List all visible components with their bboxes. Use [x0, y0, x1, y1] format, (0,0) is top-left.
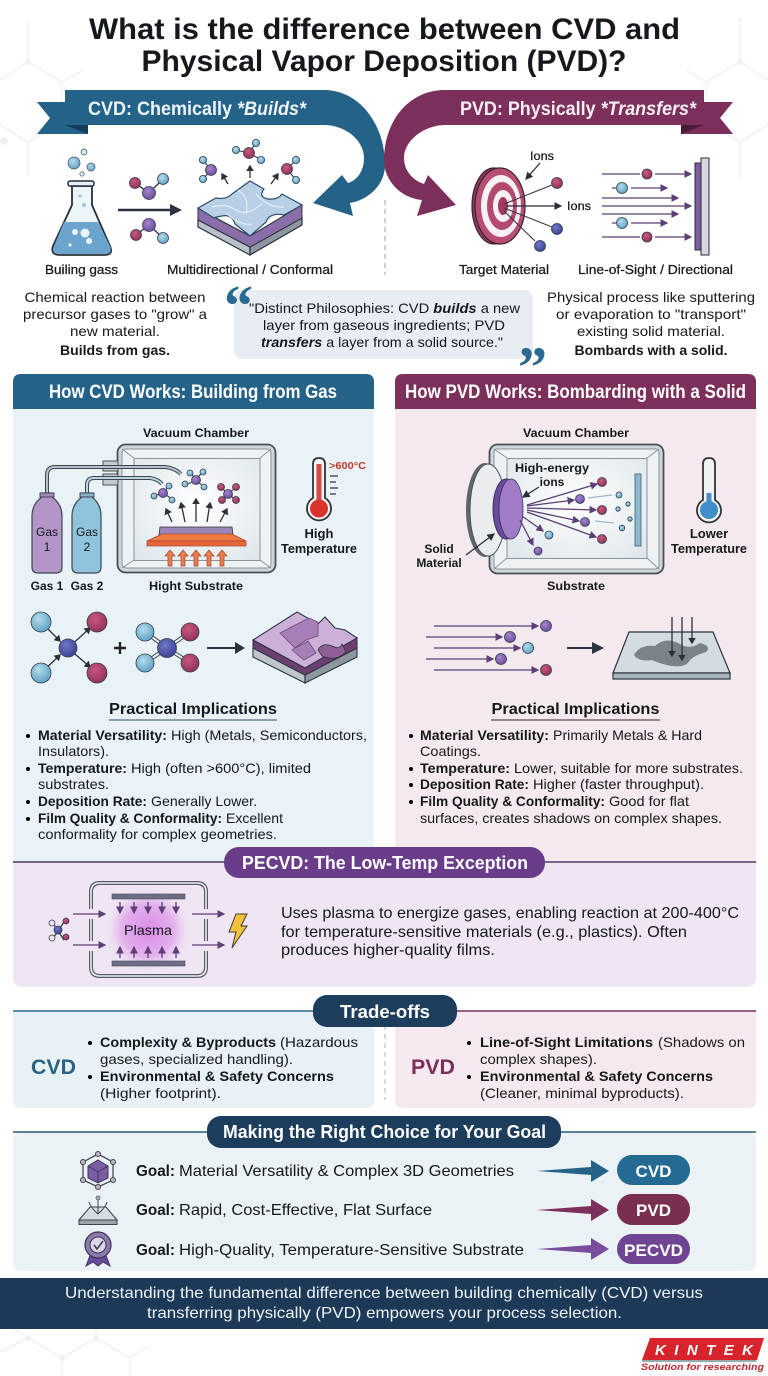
goal row 1: Goal: [136, 1163, 175, 1180]
PVD trade-offs panel [395, 1011, 756, 1108]
PVD trade-offs panel: Environmental & Safety Concerns [480, 1068, 713, 1084]
section: making the right choice [13, 1116, 756, 1271]
callout: distinct philosophies quote: transfers a layer from a solid source." [261, 334, 503, 350]
icon: lightning bolt [229, 914, 247, 948]
goal row 2: Rapid, Cost-Effective, Flat Surface [179, 1202, 432, 1219]
callout: distinct philosophies quote: layer from gaseous ingredients; PVD [263, 317, 505, 333]
footer banner: Understanding the fundamental difference between building chemically (CVD) versus [65, 1285, 703, 1302]
heading pill [207, 1116, 561, 1148]
logo: KINTEK: Solution for researching [641, 1362, 764, 1373]
panel: how PVD works [395, 374, 756, 862]
banner: PVD physically transfers with curved arrow: PVD: Physically *Transfers* [460, 99, 698, 120]
icon: gas cylinder 2: Gas [76, 525, 98, 539]
goal row 2: PVD [636, 1201, 671, 1220]
diagram: PVD vacuum chamber: Substrate [547, 579, 605, 593]
text: PVD summary: existing solid material. [577, 323, 725, 339]
icon: high temperature thermometer [281, 458, 366, 556]
PVD practical implications: Practical Implications [492, 701, 660, 718]
icon: gas cylinder 1: Gas [36, 525, 58, 539]
CVD practical implications: Deposition Rate: [38, 793, 147, 809]
panel heading: How CVD Works: Building from Gas [49, 382, 337, 403]
PVD trade-offs panel: (Shadows on [658, 1034, 745, 1050]
callout: distinct philosophies quote: "Distinct Philosophies: CVD builds a new [249, 300, 521, 316]
banner: CVD chemically builds with curved arrow: CVD: Chemically *Builds* [88, 99, 308, 120]
goal row 3: Goal: [136, 1242, 175, 1259]
goal row 2 [136, 1194, 690, 1225]
logo: KINTEK [641, 1338, 764, 1373]
PVD practical implications: Film Quality & Conformality: [420, 793, 605, 809]
directional particle stream [426, 620, 604, 676]
goal row 1 [136, 1155, 690, 1185]
text: PVD summary [547, 289, 755, 358]
text: CVD summary: Builds from gas. [60, 342, 170, 358]
CVD practical implications: Generally Lower. [151, 793, 257, 809]
icon: lower temperature thermometer: Temperature [671, 541, 747, 556]
PECVD heading pill: PECVD: The Low-Temp Exception [242, 853, 528, 873]
PECVD description: Uses plasma to energize gases, enabling reaction at 200-400°C [281, 905, 739, 922]
PVD trade-offs panel: PVD [411, 1056, 455, 1079]
CVD practical implications [26, 701, 367, 842]
PVD practical implications: Temperature: [420, 760, 510, 776]
CVD trade-offs panel: Environmental & Safety Concerns [100, 1068, 334, 1084]
CVD practical implications: Film Quality & Conformality: [38, 810, 222, 826]
CVD practical implications: conformality for complex geometries. [38, 826, 277, 842]
icon: target material with ions: Ions [567, 199, 591, 213]
diagram: CVD vacuum chamber: Hight Substrate [149, 579, 243, 593]
icon labels row: Builing gass [45, 263, 118, 277]
CVD practical implications: Temperature: [38, 760, 127, 776]
CVD trade-offs panel: Complexity & Byproducts [100, 1034, 276, 1050]
CVD practical implications: substrates. [38, 776, 109, 792]
diagram: PVD vacuum chamber: Solid [424, 542, 454, 556]
icon labels row [45, 263, 733, 277]
trade-offs heading pill [313, 995, 457, 1027]
icon: gas cylinder 2: Gas 2 [71, 579, 104, 593]
CVD trade-offs panel: gases, specialized handling). [100, 1051, 293, 1067]
text: PVD summary: or evaporation to "transport" [556, 306, 746, 322]
icon: high temperature thermometer: Temperature [281, 541, 357, 556]
icon: lower temperature thermometer: Lower [690, 526, 728, 541]
text: CVD summary: precursor gases to "grow" a [23, 306, 207, 322]
goal row 2: Goal: [136, 1202, 175, 1219]
text: PVD summary: Physical process like sputtering [547, 289, 755, 305]
callout: distinct philosophies quote: ” [518, 335, 547, 400]
PVD practical implications: Higher (faster throughput). [533, 776, 704, 792]
CVD practical implications: High (Metals, Semiconductors, [171, 727, 367, 743]
diagram: PVD vacuum chamber: Vacuum Chamber [523, 426, 629, 440]
diagram: PVD vacuum chamber: High-energy [515, 461, 589, 475]
CVD trade-offs panel [13, 1011, 374, 1108]
icon: 3D lattice cube [80, 1152, 116, 1190]
icon: flat surface with deposition [79, 1196, 117, 1224]
text: PVD summary: Bombards with a solid. [574, 342, 728, 358]
PVD trade-offs panel: complex shapes). [480, 1051, 597, 1067]
PVD practical implications [409, 701, 743, 826]
footer banner: transferring physically (PVD) empowers your process selection. [147, 1305, 622, 1322]
icon: plasma chamber [49, 883, 224, 976]
PVD trade-offs panel: (Cleaner, minimal byproducts). [480, 1085, 684, 1101]
CVD practical implications: High (often >600°C), limited [131, 760, 311, 776]
icon: quality ribbon badge [85, 1232, 111, 1266]
PVD practical implications: Primarily Metals & Hard [553, 727, 702, 743]
PECVD description [281, 905, 739, 959]
icon: conformal puzzle block with emitted molecules [198, 139, 302, 255]
icon: line-of-sight arrows onto substrate [602, 158, 709, 255]
icon: target material with ions: Ions [530, 149, 554, 163]
PVD practical implications: surfaces, creates shadows on complex shapes. [420, 810, 722, 826]
text: CVD summary [23, 289, 207, 358]
PVD practical implications: Lower, suitable for more substrates. [514, 760, 743, 776]
title: Physical Vapor Deposition (PVD)? [142, 45, 626, 78]
text: CVD summary: new material. [70, 323, 160, 339]
PECVD description: produces higher-quality films. [281, 942, 495, 959]
goal row 1: Material Versatility & Complex 3D Geometries [179, 1163, 514, 1180]
banner: PVD physically transfers with curved arrow [384, 90, 733, 216]
PVD practical implications: Good for flat [609, 793, 689, 809]
callout: distinct philosophies quote [224, 273, 547, 400]
PVD practical implications: Coatings. [420, 743, 481, 759]
panel heading [395, 374, 756, 409]
icon labels row: Multidirectional / Conformal [167, 263, 333, 277]
diagram: CVD vacuum chamber [47, 426, 276, 593]
footer banner [0, 1278, 768, 1329]
icon: high temperature thermometer: >600°C [329, 460, 366, 472]
goal row 3 [136, 1234, 690, 1264]
CVD trade-offs panel: (Hazardous [280, 1034, 358, 1050]
icon: gas cylinder 2: 2 [84, 540, 91, 554]
section: trade-offs [13, 995, 756, 1108]
icon: lower temperature thermometer [671, 458, 747, 556]
callout: distinct philosophies quote: “ [224, 273, 253, 338]
CVD trade-offs panel: (Higher footprint). [100, 1085, 221, 1101]
icon labels row: Line-of-Sight / Directional [578, 263, 733, 277]
logo: KINTEK: KINTEK [655, 1342, 754, 1359]
icon labels row: Target Material [459, 263, 549, 277]
icon: gas cylinder 1: 1 [44, 540, 51, 554]
icon: plasma chamber: Plasma [124, 922, 172, 938]
goal row 3: PECVD [624, 1241, 683, 1260]
PVD trade-offs panel: Line-of-Sight Limitations [480, 1034, 653, 1050]
title [89, 13, 680, 78]
icon: flat plate with shadowed deposit [613, 617, 730, 679]
banner: CVD chemically builds with curved arrow [37, 90, 385, 216]
diagram: PVD vacuum chamber: Material [416, 556, 462, 570]
CVD practical implications: Practical Implications [109, 701, 277, 718]
icon: gas cylinder 1 [31, 493, 64, 593]
PVD practical implications: Material Versatility: [420, 727, 549, 743]
CVD practical implications: Material Versatility: [38, 727, 167, 743]
icon: gas cylinder 2 [71, 493, 104, 593]
icon: high temperature thermometer: High [305, 526, 333, 541]
CVD trade-offs panel: CVD [31, 1056, 76, 1079]
icon: flask with bubbles [52, 149, 111, 255]
PECVD description: for temperature-sensitive materials (e.g., plastics). Often [281, 924, 687, 941]
icon: target material with ions [472, 149, 591, 252]
goal row 1: CVD [636, 1162, 671, 1181]
trade-offs heading pill: Trade-offs [340, 1002, 430, 1022]
diagram: PVD vacuum chamber: ions [540, 475, 565, 489]
title: What is the difference between CVD and [89, 13, 680, 46]
text: CVD summary: Chemical reaction between [24, 289, 206, 305]
CVD practical implications: Insulators). [38, 743, 109, 759]
icon: gas cylinder 1: Gas 1 [31, 579, 64, 593]
diagram: PVD vacuum chamber [416, 426, 664, 593]
panel: PECVD low-temp exception [13, 847, 756, 987]
divider [384, 200, 386, 275]
CVD practical implications: Excellent [226, 810, 283, 826]
panel: how CVD works [13, 374, 374, 862]
heading pill: Making the Right Choice for Your Goal [223, 1122, 546, 1142]
PECVD heading pill [224, 847, 545, 878]
diagram: CVD vacuum chamber: Vacuum Chamber [143, 426, 249, 440]
icon: conformal coated block [253, 612, 357, 683]
molecule reaction illustration [31, 612, 245, 683]
panel heading [13, 374, 374, 409]
molecules and arrow: gas to film [118, 174, 182, 244]
goal row 3: High-Quality, Temperature-Sensitive Substrate [179, 1242, 524, 1259]
PVD practical implications: Deposition Rate: [420, 776, 529, 792]
